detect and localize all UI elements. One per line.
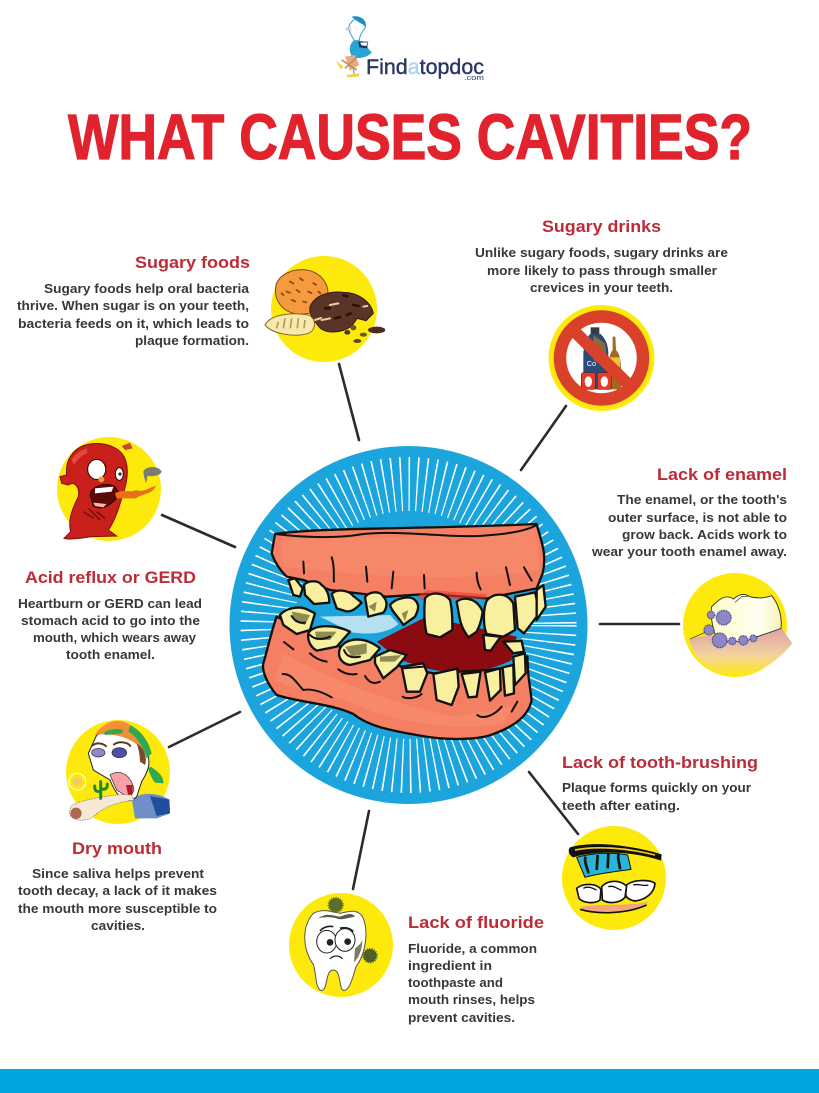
logo domain: .com [464, 73, 484, 82]
text: acid reflux description [18, 596, 202, 662]
heading: lack of tooth-brushing: Lack of tooth-brushing [562, 753, 758, 772]
text: sugary drinks description: more likely to pass through smaller [487, 263, 717, 278]
heading: dry mouth: Dry mouth [72, 839, 162, 858]
text: tooth-brushing description [562, 780, 751, 813]
logo wordmark: Findatopdoc [366, 56, 484, 79]
text: fluoride description: ingredient in [408, 958, 492, 973]
panel: lack of fluoride [289, 893, 544, 1025]
text: fluoride description: Fluoride, a common [408, 941, 537, 956]
icon: no sugary drinks sign [548, 305, 654, 411]
text: dry mouth description: the mouth more susceptible to [18, 901, 217, 916]
upper gum [272, 524, 544, 598]
text: fluoride description: prevent cavities. [408, 1010, 515, 1025]
panel: dry mouth [18, 720, 217, 933]
text: acid reflux description: Heartburn or GERD can lead [18, 596, 202, 611]
text: dry mouth description [18, 866, 217, 933]
text: sugary foods description: thrive. When sugar is on your teeth, [17, 298, 249, 313]
back teeth behind [483, 635, 524, 653]
text: lack of enamel description [591, 492, 787, 559]
footer bar [0, 1069, 819, 1093]
heading: acid reflux or GERD: Acid reflux or GERD [25, 568, 196, 587]
heading: sugary drinks: Sugary drinks [542, 217, 661, 236]
icon: man with dry tongue [66, 720, 170, 824]
text: sugary foods description: plaque formation. [135, 333, 249, 348]
text: sugary drinks description [475, 245, 728, 295]
blue sunburst disc [230, 446, 588, 804]
text: fluoride description: toothpaste and [408, 975, 503, 990]
connector lines [162, 364, 679, 889]
icon: eroded tooth with bacteria [683, 573, 792, 677]
text: tooth-brushing description: teeth after eating. [562, 798, 680, 813]
upper teeth [288, 578, 546, 637]
teeth and gums [263, 524, 546, 739]
text: acid reflux description: tooth enamel. [66, 647, 155, 662]
text: sugary drinks description: crevices in your teeth. [530, 280, 673, 295]
icon: sad tooth with germs [289, 893, 393, 997]
panel: lack of enamel [591, 465, 792, 677]
text: fluoride description: mouth rinses, helps [408, 992, 535, 1007]
lower gum [263, 617, 532, 739]
icon: duck mascot [336, 16, 372, 77]
text: lack of enamel description: outer surface, is not able to [608, 510, 787, 525]
icon: burning stomach character [57, 437, 162, 541]
heading: lack of fluoride: Lack of fluoride [408, 913, 544, 932]
text: dry mouth description: cavities. [91, 918, 145, 933]
text: fluoride description [408, 941, 537, 1025]
icon: cookies [265, 256, 385, 362]
icon: toothbrush and teeth [562, 826, 666, 930]
panel: sugary foods [17, 253, 385, 362]
text: sugary drinks description: Unlike sugary foods, sugary drinks are [475, 245, 728, 260]
heading: sugary foods: Sugary foods [135, 253, 250, 272]
icon: no sugary drinks sign: Co [587, 359, 596, 368]
text: sugary foods description: Sugary foods help oral bacteria [44, 281, 250, 296]
text: dry mouth description: Since saliva helps prevent [32, 866, 205, 881]
text: sugary foods description [17, 281, 250, 348]
text: acid reflux description: mouth, which wears away [33, 630, 197, 645]
text: lack of enamel description: The enamel, or the tooth's [617, 492, 787, 507]
text: acid reflux description: stomach acid to go into the [21, 613, 200, 628]
text: lack of enamel description: wear your tooth enamel away. [591, 544, 787, 559]
tongue highlight [320, 615, 398, 634]
mouth interior [377, 617, 517, 672]
text: lack of enamel description: grow back. Acids work to [622, 527, 787, 542]
heading: lack of enamel: Lack of enamel [657, 465, 787, 484]
panel: acid reflux or GERD [18, 437, 202, 662]
panel: lack of tooth-brushing [562, 753, 758, 930]
text: sugary foods description: bacteria feeds on it, which leads to [18, 316, 249, 331]
text: dry mouth description: tooth decay, a lack of it makes [18, 883, 217, 898]
text: tooth-brushing description: Plaque forms quickly on your [562, 780, 751, 795]
lower teeth [280, 608, 526, 705]
panel: sugary drinks [475, 217, 728, 411]
logo: Findatopdoc [336, 16, 484, 82]
central illustration: decayed teeth on blue burst [230, 446, 588, 804]
